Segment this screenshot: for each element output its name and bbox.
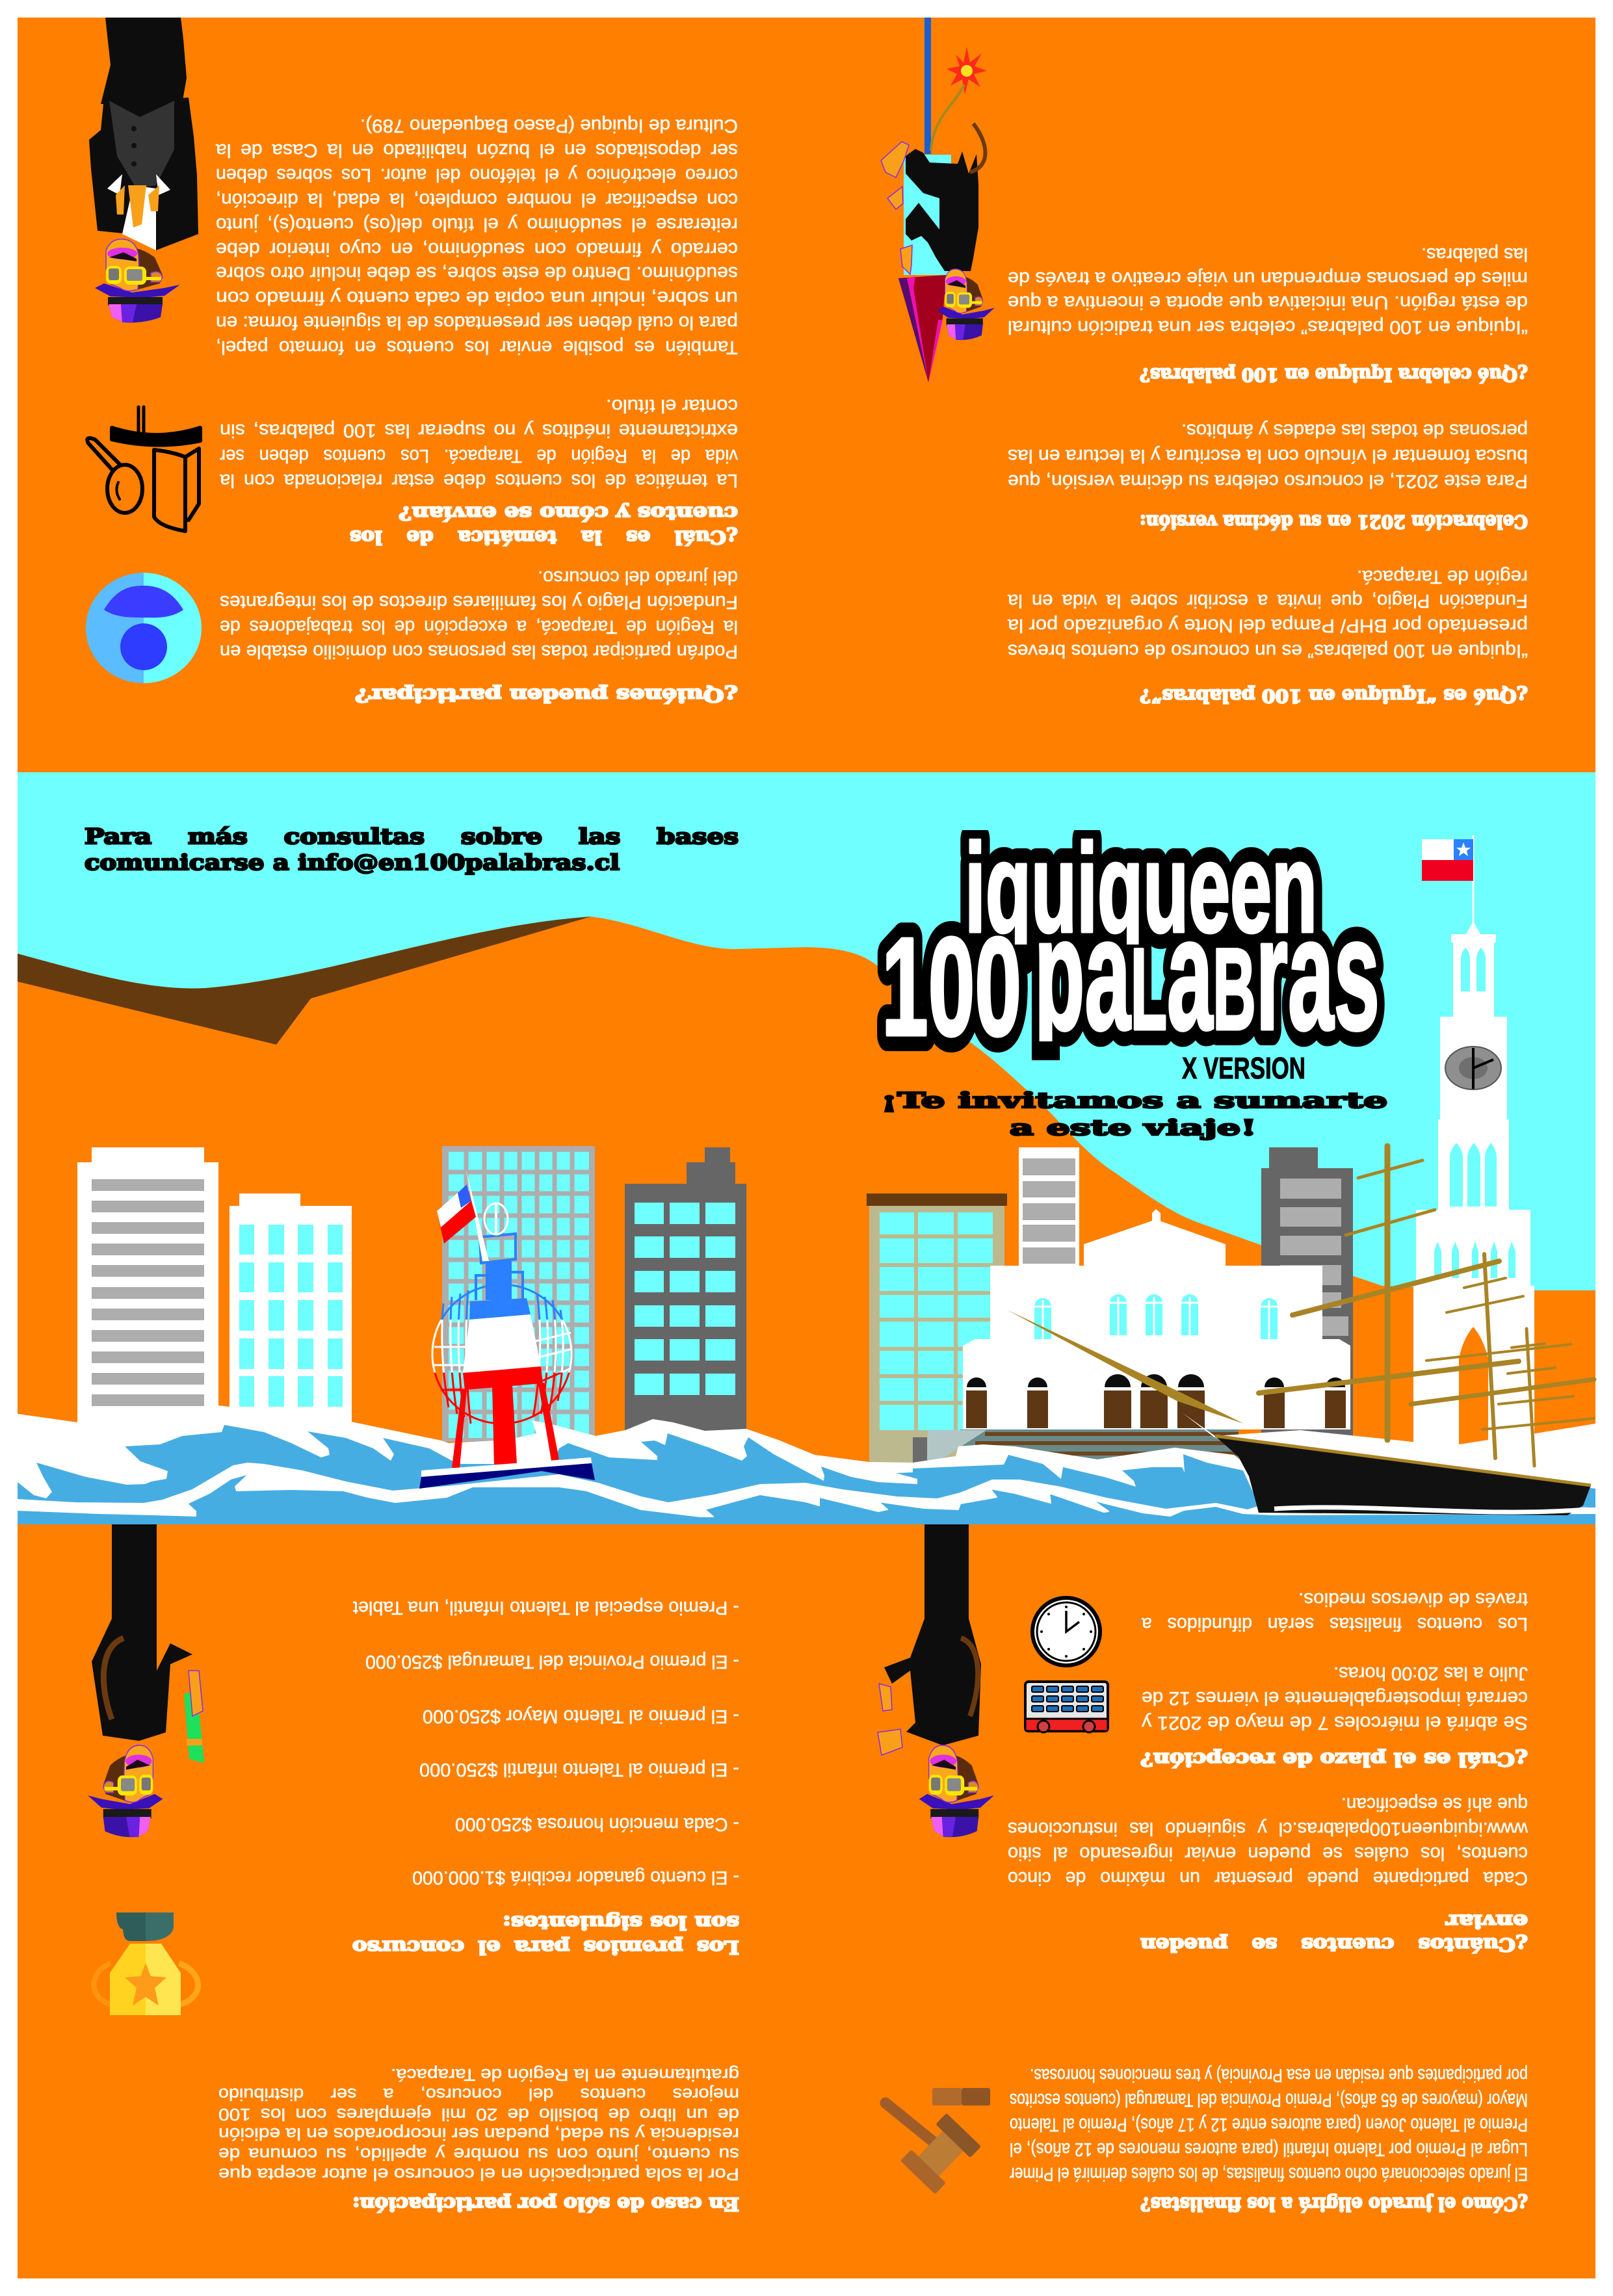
text: quienes	[220, 567, 738, 662]
text: formato papel: un sobre, incluir una copia de cada cuento y firmado con	[216, 287, 738, 308]
clock tower with flag	[1413, 835, 1534, 1456]
text: formato papel	[215, 115, 738, 358]
text: que celebra: de está región. Una iniciativa que aporta e incentiva a que	[1008, 292, 1528, 313]
heading: que es: ¿Qué es “Iquique en 100 palabras”?	[1140, 685, 1528, 707]
logo white lettering: 100	[882, 908, 1021, 1065]
text: quienes: la Región de Tarapacá, a excepción de los trabajadores de	[220, 616, 738, 637]
logo black outline: paLaBras	[1034, 885, 1380, 1063]
text: jurado: Lugar al Premio por Talento Infantil (para autores menores de 12 años), el	[1010, 2139, 1528, 2159]
prize list: - Cada mención honrosa $250.000	[455, 1814, 739, 1834]
icon: radio	[1025, 1682, 1108, 1732]
sailing ship	[1007, 1146, 1595, 1515]
sky	[18, 772, 1595, 1524]
text: formato papel: con especificar el nombre completo, la edad, la dirección,	[216, 189, 738, 210]
text: tematica: La temática de los cuentos debe estar relacionada con la	[219, 470, 738, 491]
text: cuantos	[1008, 1794, 1528, 1888]
prize list: - El cuento ganador recibirá $1.000.000	[412, 1867, 739, 1888]
text: tematica	[219, 395, 738, 491]
heading: plazo: ¿Cuál es el plazo de recepción?	[1140, 1749, 1528, 1770]
heading: premios: son los siguientes:	[503, 1912, 739, 1933]
heading: cuantos	[1140, 1911, 1528, 1955]
text: plazo: Julio a las 20:00 horas.	[1333, 1663, 1528, 1684]
text: caso: gratuitamente en la Región de Tarapacá.	[391, 2065, 739, 2085]
text: que es: “Iquique en 100 palabras” es un concurso de cuentos breves	[1008, 640, 1528, 661]
text: caso	[218, 2065, 739, 2184]
edition label: X VERSION	[1182, 1051, 1305, 1085]
heading: tematica: cuentos y cómo se envían?	[399, 502, 738, 524]
text: celebracion: busca fomentar el vínculo con la escritura y la lectura en las	[1008, 445, 1528, 466]
text: que es: presentado por BHP/ Pampa del Norte y organizado por la	[1007, 615, 1528, 636]
waves: white streak	[18, 1463, 1595, 1517]
logo white lettering: paLaBras	[1034, 885, 1380, 1063]
icon: trophy	[94, 1912, 198, 2015]
text: plazo: Se abrirá el miércoles 7 de mayo de 2021 y	[1141, 1712, 1528, 1733]
icon: person in circle	[86, 573, 202, 683]
municipal theatre	[963, 1209, 1350, 1429]
text: que es: región de Tarapacá.	[1357, 566, 1528, 587]
text: cuantos: que ahí se especifican.	[1341, 1794, 1528, 1814]
prize list: - El premio Provincia del Tamarugal $250.000	[365, 1651, 739, 1672]
heading: cuantos: ¿Cuántos cuentos se pueden	[1140, 1934, 1528, 1955]
text: formato papel: reiterarse el seudónimo y el título del(os) cuento(s), junto	[216, 214, 738, 235]
icon: book and magnifier	[87, 407, 200, 531]
text: caso: su cuento, junto con su nombre y apellido, su comuna de	[218, 2145, 739, 2164]
figure: man with banknote, lower left	[88, 1524, 204, 1837]
icon: wall clock	[1030, 1596, 1102, 1667]
text: cuantos: www.iquiqueen100palabras.cl y siguiendo las instrucciones	[1008, 1818, 1528, 1839]
text: finalistas: través de diversos medios.	[1298, 1589, 1528, 1610]
heading: tematica: ¿Cuál es la temática de los	[350, 527, 738, 548]
buoy cage	[432, 1285, 572, 1424]
firework	[931, 47, 987, 151]
waves: blue sea	[18, 1425, 1595, 1524]
logo	[882, 817, 1380, 1065]
orange hills	[18, 917, 1595, 1524]
text: celebracion	[1008, 420, 1528, 491]
panel: upside-down lower left column text	[218, 1597, 739, 2215]
heading: premios	[352, 1912, 739, 1958]
bowsprit	[1007, 1310, 1244, 1424]
slogan: a este viaje!	[1010, 1115, 1257, 1140]
contact text	[85, 824, 739, 875]
heading: quienes: ¿Quiénes pueden participar?	[355, 685, 738, 706]
building: glass grid tower	[442, 1146, 595, 1442]
buoy flag	[437, 1184, 476, 1244]
logo black outline	[882, 817, 1380, 1065]
logo white lettering: iquiqueen	[965, 817, 1317, 959]
text: cuantos: cuentos, los cuáles se pueden enviar ingresando al sitio	[1008, 1843, 1528, 1864]
text: quienes: Fundación Plagio y los familiares directos de los integrantes	[220, 592, 738, 612]
icon: gavel	[885, 2088, 990, 2194]
text: formato papel: para lo cuál deben ser presentados de la siguiente forma: en	[216, 312, 738, 333]
heading: que celebra: ¿Qué celebra Iquique en 100 palabras?	[1140, 364, 1528, 385]
clock face	[1445, 1047, 1501, 1089]
prize list: - El premio al Talento Mayor $250.000	[423, 1706, 739, 1727]
text: plazo	[1141, 1663, 1528, 1733]
text: que celebra: las palabras.	[1421, 244, 1528, 265]
logo white lettering	[882, 817, 1380, 1065]
panel: upside-down lower right column text	[1008, 1589, 1528, 2215]
text: finalistas	[1141, 1589, 1528, 1634]
text: cuantos: Cada participante puede presentar un máximo de cinco	[1008, 1868, 1528, 1888]
slogan: ¡Te invitamos a sumarte	[881, 1088, 1387, 1113]
text: formato papel: Cultura de Iquique (Paseo Baquedano 789).	[360, 115, 738, 136]
text: tematica: contar el título.	[606, 395, 738, 416]
heading: celebracion: Celebración 2021 en su décima versión:	[1140, 511, 1528, 532]
text: caso: de un libro de bolsillo de 20 mil ejemplares con los 100	[218, 2105, 739, 2124]
text: formato papel: ser depositados en el buzón habilitado en la Casa de la	[215, 140, 738, 161]
text: jurado: El jurado seleccionará ocho cuentos finalistas, de los cuáles derimirá el Primer	[1010, 2163, 1528, 2184]
text: formato papel: correo electrónico y el teléfono del autor. Los sobres deben	[216, 164, 738, 185]
text: plazo: cerrará impostergablemente el viernes 12 de	[1142, 1688, 1528, 1708]
text: que es: Fundación Plagio, que invita a escribir sobre la vida en la	[1007, 590, 1528, 611]
prize list: - El premio al Talento infantil $250.000	[419, 1759, 739, 1780]
text: caso: mejores cuentos del concurso, a ser distribuido	[218, 2085, 739, 2104]
text: que es	[1007, 566, 1528, 661]
text: quienes: del jurado del concurso.	[538, 567, 738, 588]
building: dark grey tower	[625, 1147, 746, 1437]
masts and yards	[1259, 1146, 1594, 1466]
text: quienes: Podrán participar todas las personas con domicilio estable en	[220, 641, 738, 662]
heading: caso: En caso de sólo por participación:	[352, 2193, 739, 2215]
contact text: comunicarse a info@en100palabras.cl	[85, 850, 620, 875]
buoy	[419, 1170, 595, 1489]
building: white with cyan windows	[229, 1194, 352, 1430]
rocket cone	[898, 275, 946, 382]
prize list	[353, 1597, 739, 1888]
text: que celebra	[1008, 244, 1528, 337]
building: tan glass office	[867, 1194, 1007, 1466]
text: formato papel: También es posible enviar los cuentos en formato papel,	[216, 337, 738, 358]
tower door	[1459, 1327, 1488, 1444]
tower flag	[1422, 835, 1475, 936]
heading: cuantos: enviar	[1445, 1911, 1528, 1932]
panel: upside-down upper right column text	[1007, 244, 1528, 707]
text: caso: residencia y su edad, puedan ser incorporados en la edición	[218, 2124, 739, 2144]
text: finalistas: Los cuentos finalistas serán difundidos a	[1141, 1613, 1528, 1634]
prize list: - Premio especial al Talento Infantil, una Tablet	[353, 1597, 739, 1618]
figure: man in suit, upper left	[89, 18, 198, 322]
text: que celebra: “Iquique en 100 palabras” celebra ser una tradición cultural	[1008, 317, 1528, 337]
text: formato papel: cerrado y firmado con seudónimo, en cuyo interior debe	[216, 239, 738, 259]
text: celebracion: personas de todas las edades y ámbitos.	[1181, 420, 1528, 441]
heading: jurado: ¿Cómo el jurado eligirá a los finalistas?	[1140, 2193, 1528, 2215]
text: jurado: por participantes que residan en esa Provincia) y tres menciones honrosas.	[1030, 2065, 1528, 2085]
heading: tematica	[350, 502, 738, 548]
text: jurado: Mayor (mayores de 65 años), Premio Provincia del Tamarugal (cuentos escritos	[1010, 2089, 1528, 2110]
logo black outline: iquiqueen	[965, 817, 1317, 959]
panel: upside-down upper left column text	[215, 115, 738, 706]
text: jurado: Premio al Talento Joven (para autores entre 12 y 17 años), Premio al Talento	[1010, 2114, 1528, 2135]
building: grey block behind theatre	[1261, 1147, 1353, 1437]
text: jurado	[1010, 2065, 1528, 2184]
theatre steps	[927, 1429, 1239, 1465]
figure: acrobat with rocket, upper right	[881, 18, 995, 382]
text: caso: Por la sola participación en el concurso el autor acepta que	[218, 2165, 739, 2184]
text: formato papel: seudónimo. Dentro de este sobre, se debe incluir otro sobre	[216, 263, 738, 283]
waves: white foam	[18, 1405, 1595, 1524]
panel: central cover illustration	[18, 772, 1595, 1524]
text: que celebra: miles de personas emprendan un viaje creativo a través de	[1008, 268, 1528, 289]
building: white striped tower	[77, 1147, 218, 1430]
figure: man with watch, lower right	[878, 1524, 994, 1837]
heading: premios: Los premios para el concurso	[352, 1937, 739, 1958]
slogan	[881, 1088, 1387, 1140]
logo black outline: 100	[882, 908, 1021, 1065]
text: celebracion: Para este 2021, el concurso celebra su décima versión, que	[1008, 471, 1528, 491]
building: white block behind theatre	[1019, 1147, 1079, 1271]
brown hill shadow	[18, 917, 591, 1045]
rope	[925, 18, 931, 154]
text: tematica: extrictamente inéditos y no superar las 100 palabras, sin	[220, 420, 738, 441]
text: tematica: vida de la Región de Tarapacá. Los cuentos deben ser	[220, 445, 738, 466]
contact text: Para más consultas sobre las bases	[85, 824, 739, 849]
acrobat body	[904, 155, 951, 275]
